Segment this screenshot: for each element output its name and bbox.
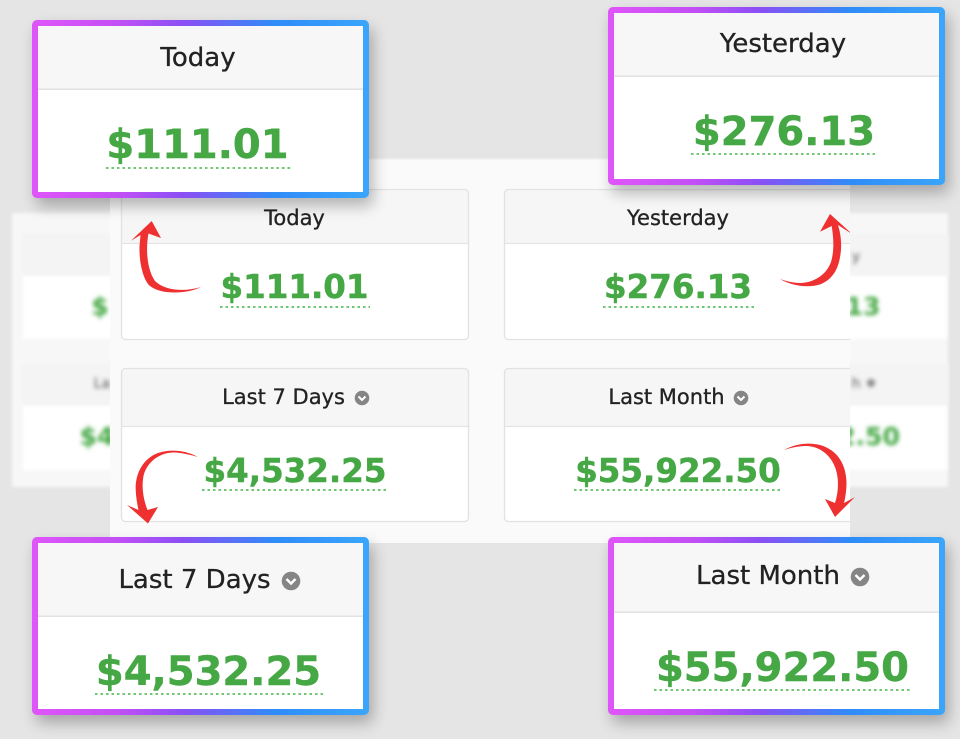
card: Last Month: $55,922.50 [575, 452, 781, 490]
callout: Last 7 Days: $4,532.25 [96, 649, 321, 695]
arrow: Last 7 Days [127, 451, 198, 524]
arrow: Today [131, 221, 201, 293]
card: Today [121, 190, 469, 340]
arrow: Yesterday [780, 214, 852, 286]
icon: chevron [851, 568, 869, 586]
callout: Today: $111.01 [106, 122, 289, 168]
blurred background panel: La [94, 376, 110, 392]
blurred background panel [12, 213, 948, 487]
arrow: Last Month [784, 444, 855, 517]
card: Today: Today [263, 206, 325, 230]
callout: Today [32, 20, 373, 206]
callout: Yesterday: $276.13 [693, 109, 875, 155]
icon: chevron [282, 572, 300, 590]
card: Last 7 Days [121, 368, 469, 522]
blurred background panel: 13 [846, 292, 880, 321]
card: Yesterday [504, 190, 864, 340]
card: Last Month: Last Month [608, 385, 725, 409]
icon: chevron [355, 391, 369, 405]
card: Yesterday: $276.13 [604, 268, 752, 306]
blurred background panel: h [852, 376, 860, 392]
blurred background panel: 2.50 [838, 422, 900, 451]
callout: Last Month [608, 537, 949, 723]
callout: Last 7 Days [32, 537, 373, 723]
card: Yesterday: Yesterday [626, 206, 729, 230]
card: Today: $111.01 [220, 268, 369, 306]
callout: Last Month: $55,922.50 [656, 645, 909, 691]
blurred background panel: y [852, 249, 860, 265]
main dashboard panel [110, 158, 864, 543]
callout: Yesterday: Yesterday [719, 29, 846, 59]
callout: Today: Today [159, 43, 236, 73]
callout: Last Month: Last Month [696, 561, 840, 591]
card: Last 7 Days: $4,532.25 [204, 452, 386, 490]
card: Last Month [504, 368, 864, 522]
callout: Last 7 Days: Last 7 Days [118, 565, 271, 595]
blurred background panel: $4 [80, 422, 114, 451]
card: Last 7 Days: Last 7 Days [222, 385, 345, 409]
icon: chevron [734, 391, 748, 405]
blurred background panel: $ [91, 292, 109, 321]
callout: Yesterday [608, 7, 949, 193]
